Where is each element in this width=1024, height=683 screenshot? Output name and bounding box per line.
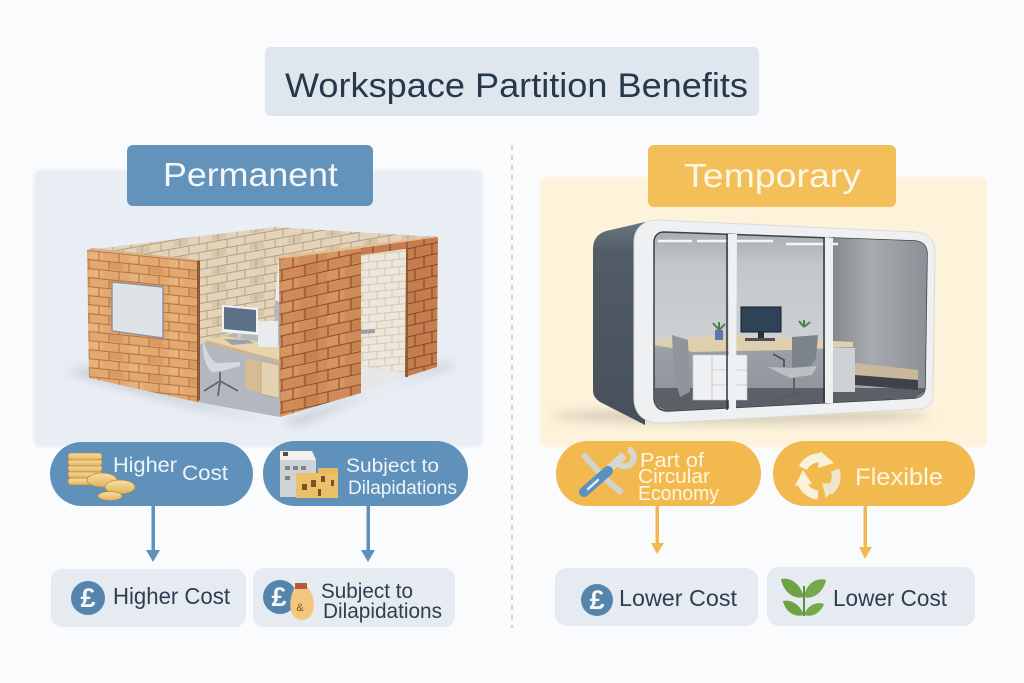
ceiling lights — [658, 241, 838, 244]
chair — [203, 340, 240, 372]
pill: part of circular economy — [556, 441, 761, 506]
pod glazing — [654, 232, 927, 411]
pill: higher cost — [50, 442, 253, 506]
label: Dilapidations — [348, 478, 457, 499]
pod frame — [634, 220, 935, 423]
icon: pound coin — [581, 584, 613, 616]
title: Workspace Partition Benefits — [285, 67, 748, 105]
icon: pound coin: £ — [80, 583, 96, 613]
left wall — [87, 248, 200, 402]
back wall — [87, 227, 275, 345]
arrow: dilapidations — [361, 506, 375, 562]
label — [638, 450, 719, 505]
mullions — [727, 234, 833, 410]
pod side — [593, 222, 645, 425]
bench — [855, 363, 918, 380]
panel: temporary — [540, 145, 987, 626]
plant left — [713, 322, 725, 340]
doorway — [361, 249, 406, 373]
icon: sprout — [781, 579, 826, 616]
office chair — [768, 335, 818, 402]
heading: temporary: Temporary — [684, 157, 862, 194]
monitor — [741, 307, 781, 332]
panel background — [34, 170, 483, 447]
plant right — [799, 320, 810, 337]
label: Lower Cost — [833, 585, 948, 611]
label: Subject to — [346, 456, 439, 477]
desk — [203, 305, 279, 398]
arrow: flexible — [859, 506, 872, 559]
monitor — [222, 305, 258, 335]
pill: flexible — [773, 441, 975, 506]
icon: pound coin and money bag — [263, 580, 314, 620]
icon: building and bricks — [280, 451, 338, 498]
label — [346, 456, 457, 499]
front right wall — [276, 236, 438, 417]
card: lower cost two — [767, 567, 975, 626]
window — [112, 282, 163, 338]
label: Part of — [640, 450, 704, 472]
side chair — [672, 335, 690, 397]
icon: wrench and screwdriver — [583, 449, 634, 493]
arrow: higher cost — [146, 506, 160, 562]
card: subject to dilapidations — [253, 568, 455, 627]
floor — [197, 300, 437, 417]
heading: permanent — [127, 145, 373, 206]
label: Higher — [113, 454, 177, 477]
panel background — [540, 177, 987, 447]
panel: permanent — [34, 145, 483, 627]
label: Circular — [638, 466, 710, 488]
arrow: circular economy — [651, 506, 664, 554]
label — [113, 454, 228, 485]
label — [321, 580, 442, 623]
card: lower cost one — [555, 568, 758, 626]
label: Economy — [638, 483, 719, 505]
floor — [655, 388, 925, 411]
card: higher cost — [51, 569, 246, 627]
heading: temporary — [648, 145, 896, 207]
label: Cost — [182, 462, 228, 485]
icon: pound coin: £ — [589, 585, 605, 615]
icon: pound coin and money bag: & — [296, 602, 304, 614]
icon: pound coin and money bag: £ — [271, 582, 287, 612]
illustration: office pod — [550, 220, 935, 425]
label: Subject to — [321, 580, 413, 603]
illustration: brick room — [66, 227, 455, 425]
heading: permanent: Permanent — [163, 156, 338, 193]
floor shadow — [66, 362, 455, 425]
label: Lower Cost — [619, 585, 738, 611]
label: Dilapidations — [323, 600, 442, 623]
label: Higher Cost — [113, 583, 231, 609]
label: Flexible — [855, 464, 943, 491]
icon: pound coin — [71, 581, 105, 615]
divider — [511, 145, 513, 628]
desk — [655, 335, 853, 352]
title — [265, 47, 759, 116]
pill: subject to dilapidations — [263, 441, 468, 506]
pod shadow — [550, 408, 930, 424]
icon: coin stack — [68, 453, 135, 500]
icon: recycle — [795, 451, 839, 498]
